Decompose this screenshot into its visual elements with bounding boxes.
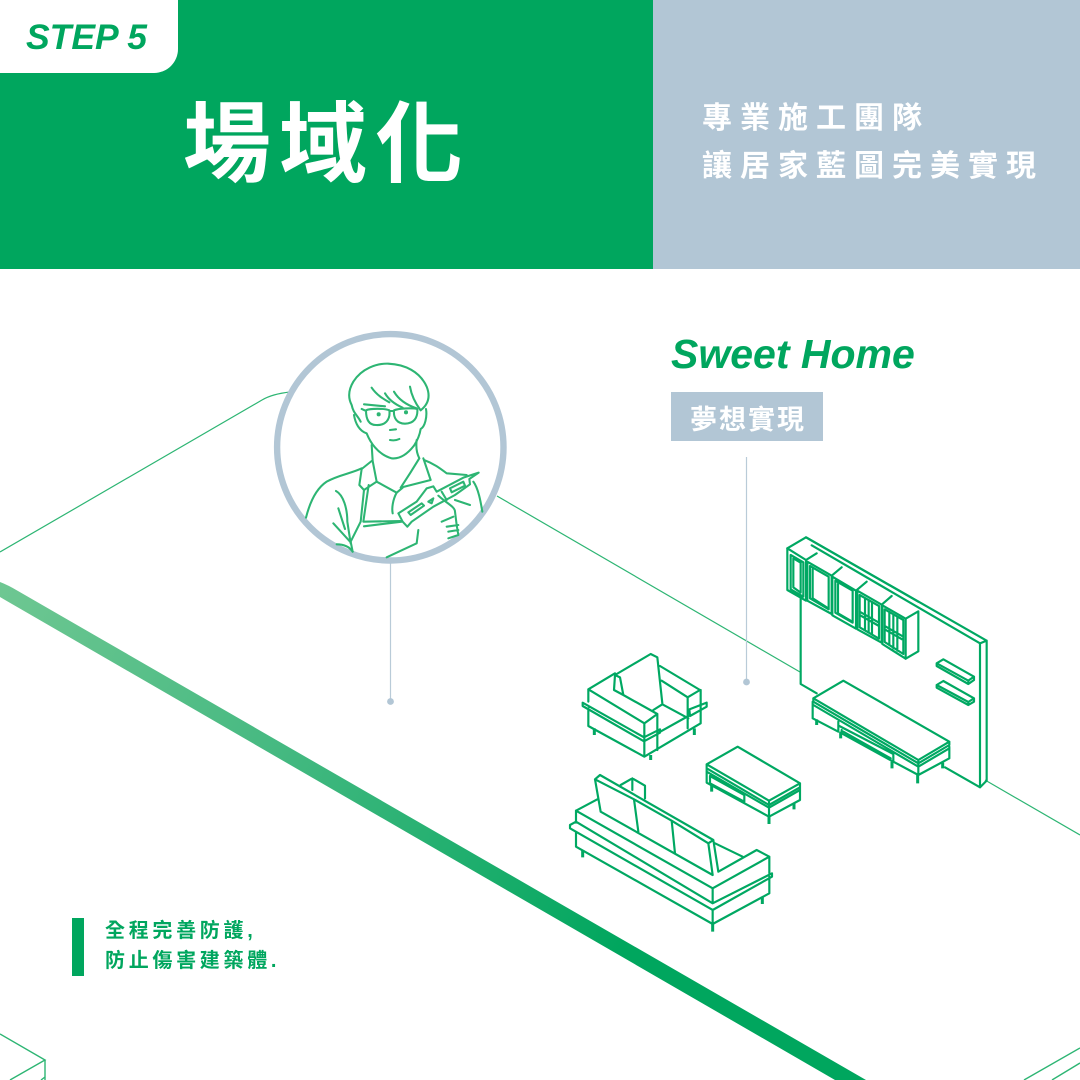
- shoulders and arms: [306, 460, 482, 552]
- wall: [787, 537, 987, 787]
- leader line: home: [743, 457, 750, 685]
- coffee table: [707, 747, 800, 817]
- panel: blue header: [653, 0, 1080, 269]
- step label: STEP 5: [26, 17, 147, 57]
- worker portrait circle: [277, 334, 503, 560]
- callout: protection note: [72, 918, 280, 976]
- leader line: worker: [387, 560, 394, 705]
- icon: worker holding a drill: [306, 364, 482, 557]
- glasses: [362, 408, 417, 425]
- face: [354, 409, 426, 458]
- callout bar: [72, 918, 84, 976]
- console legs: [817, 719, 943, 783]
- bottom right floor corner: [1024, 1048, 1080, 1080]
- tag text: 夢想實現: [690, 405, 806, 435]
- callout text: 防止傷害建築體.: [105, 950, 280, 972]
- armchair legs: [594, 728, 694, 760]
- bottom left floor corner: [0, 1034, 45, 1080]
- floor thick front edge: [0, 582, 866, 1080]
- sofa legs: [583, 850, 762, 932]
- coffee table legs: [712, 785, 794, 824]
- tag: dream realised: [671, 392, 823, 441]
- sofa: [570, 775, 772, 924]
- sofa, armchair and coffee table: [570, 654, 800, 932]
- header subtitle: 專業施工團隊: [702, 102, 930, 135]
- apron: [351, 485, 418, 557]
- callout text: [105, 920, 280, 972]
- callout text: 全程完善防護,: [105, 920, 256, 942]
- wall cabinets: [787, 537, 918, 659]
- drill: [398, 473, 479, 538]
- title: 場域化: [183, 95, 471, 194]
- heading: Sweet Home: Sweet Home: [671, 331, 915, 377]
- armchair: [583, 654, 707, 757]
- header subtitle: [702, 102, 1044, 183]
- TV wall with cabinets and console: [787, 537, 987, 787]
- floating shelves: [937, 659, 974, 684]
- TV console: [813, 681, 949, 775]
- panel: green header: [0, 0, 653, 269]
- neck and collar: [359, 440, 431, 493]
- step badge: [0, 0, 178, 73]
- header subtitle: 讓居家藍圖完美實現: [702, 150, 1044, 183]
- floor outline: [0, 392, 1080, 835]
- hair: [349, 364, 429, 422]
